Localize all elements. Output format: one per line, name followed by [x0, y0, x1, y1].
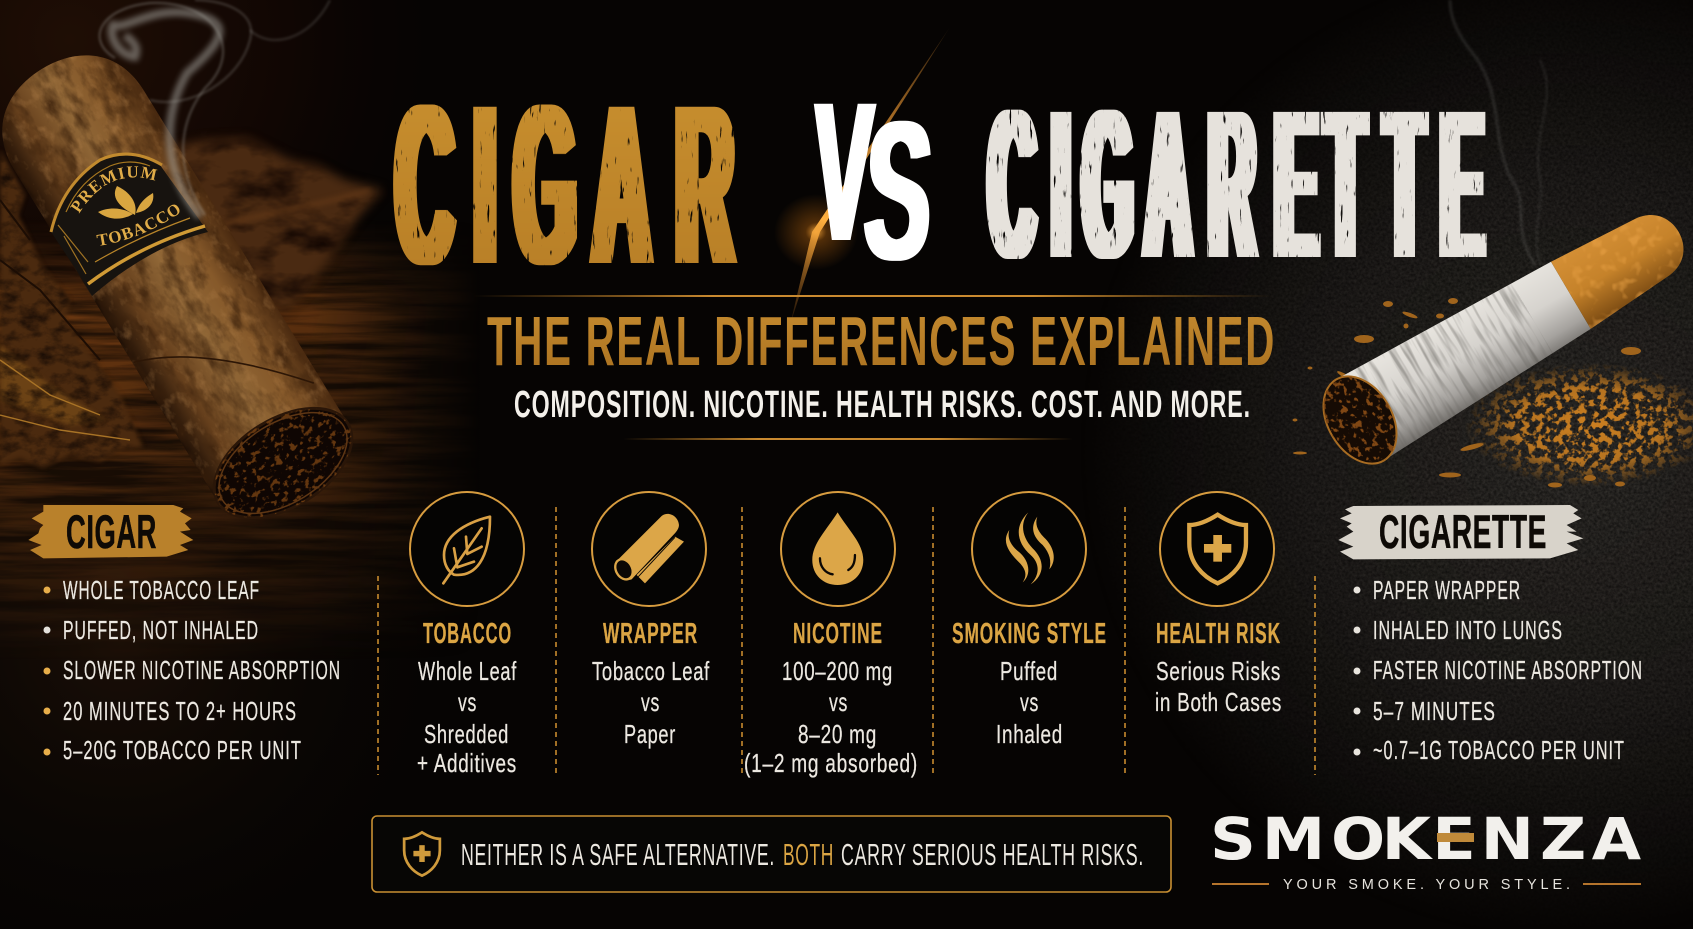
logo: [1210, 806, 1641, 893]
cigarette: [1322, 215, 1684, 465]
tagline: COMPOSITION. NICOTINE. HEALTH RISKS. COST. AND MORE.: [514, 384, 1251, 426]
heading: wrapper: WRAPPER: [603, 618, 698, 650]
rule bottom: [623, 438, 1073, 440]
text: tobacco comparison: + Additives: [417, 748, 517, 778]
cigar list text: 5–20G TOBACCO PER UNIT: [63, 735, 302, 765]
callout: warning: [372, 816, 1171, 892]
icon: smoke waves: [972, 492, 1086, 606]
cigar wrapper body: [2, 55, 353, 518]
column: nicotine: [744, 492, 918, 778]
asphalt surface: [1148, 30, 1693, 867]
logo rule right: [1583, 883, 1641, 885]
text: nicotine comparison: [744, 656, 918, 778]
warning text: NEITHER IS A SAFE ALTERNATIVE.: [461, 837, 775, 872]
cigarette list text: INHALED INTO LUNGS: [1373, 615, 1563, 645]
column: tobacco: [410, 492, 524, 778]
text: tobacco comparison: Whole Leaf: [418, 656, 517, 686]
cigarette bullets: [1354, 586, 1360, 756]
CIGAR word: CIGAR: [396, 59, 733, 312]
cigar list text: WHOLE TOBACCO LEAF: [63, 575, 260, 605]
text: tobacco comparison: [417, 656, 517, 778]
rule top: [473, 295, 1273, 297]
cigar list text: [63, 575, 341, 765]
cut foot of cigar: [214, 406, 353, 518]
cigarette list text: PAPER WRAPPER: [1373, 575, 1521, 605]
logo rule left: [1212, 883, 1269, 885]
logo wordmark: SMOKENZA: [1210, 806, 1641, 873]
cigarette brush heading: CIGARETTE: [1379, 505, 1547, 558]
filter tip: [1551, 215, 1684, 329]
text: wrapper comparison: Tobacco Leaf: [592, 656, 710, 686]
logo tagline: YOUR SMOKE. YOUR STYLE.: [1283, 877, 1570, 893]
text: style comparison: [996, 656, 1063, 749]
text: style comparison: Puffed: [1000, 656, 1058, 686]
title: [396, 27, 1483, 325]
VS: V: [811, 61, 876, 283]
cigar: [2, 55, 353, 518]
tobacco pile: [1292, 298, 1693, 495]
warning text: BOTH: [783, 837, 834, 872]
tobacco leaves behind cigar: [0, 138, 383, 468]
heading: smoking style: SMOKING STYLE: [952, 618, 1107, 650]
text: health comparison: [1155, 656, 1282, 717]
text: nicotine comparison: 8–20 mg: [798, 719, 877, 749]
heading: health risk: HEALTH RISK: [1156, 618, 1281, 650]
column: health risk: [1155, 492, 1282, 717]
glow streak: [774, 27, 950, 325]
text: wrapper comparison: vs: [641, 687, 660, 717]
TOBACCO label: TOBACCO: [96, 204, 180, 246]
CIGARETTE word: CIGARETTE: [989, 67, 1483, 303]
panel: cigar list: [28, 505, 341, 765]
cigar smoke: [100, 0, 330, 217]
heading: nicotine: NICOTINE: [793, 618, 883, 650]
cigarette brush heading: [1338, 505, 1583, 559]
wood table: [0, 240, 461, 636]
cigar bullets: [44, 586, 50, 756]
text: wrapper comparison: Paper: [624, 719, 676, 749]
cigar list text: PUFFED, NOT INHALED: [63, 615, 259, 645]
cigar list text: SLOWER NICOTINE ABSORPTION: [63, 655, 341, 685]
cigar list text: 20 MINUTES TO 2+ HOURS: [63, 696, 297, 726]
VS: [811, 61, 937, 302]
cigarette list text: 5–7 MINUTES: [1373, 696, 1496, 726]
icon: shield: [1160, 492, 1274, 606]
text: style comparison: vs: [1020, 687, 1039, 717]
VS: S: [860, 81, 937, 302]
paper body: [1336, 255, 1595, 460]
cigar brush heading: [28, 505, 193, 558]
icon: warning shield: [404, 832, 440, 876]
dashed dividers: [378, 507, 1315, 775]
text: nicotine comparison: 100–200 mg: [782, 656, 893, 686]
icon: drop: [781, 492, 895, 606]
column: smoking style: [952, 492, 1107, 749]
tobacco end: [1322, 375, 1398, 465]
text: health comparison: Serious Risks: [1156, 656, 1281, 686]
cigarette list text: [1373, 575, 1643, 765]
logo gold bar: [1437, 833, 1474, 842]
cigar brush heading: CIGAR: [66, 505, 157, 558]
heading: tobacco: TOBACCO: [423, 618, 512, 650]
text: style comparison: Inhaled: [996, 719, 1063, 749]
column: wrapper: [592, 492, 710, 749]
text: nicotine comparison: vs: [829, 687, 848, 717]
text: wrapper comparison: [592, 656, 710, 749]
cigarette smoke: [1450, 0, 1547, 265]
icon: leaf: [410, 492, 524, 606]
text: health comparison: in Both Cases: [1155, 687, 1282, 717]
text: nicotine comparison: (1–2 mg absorbed): [744, 748, 918, 778]
text: tobacco comparison: Shredded: [424, 719, 509, 749]
text: tobacco comparison: vs: [458, 687, 477, 717]
band leaf emblem: [98, 186, 153, 219]
icon: paper roll: [592, 492, 706, 606]
warning text: CARRY SERIOUS HEALTH RISKS.: [841, 837, 1144, 872]
cigar band: [50, 152, 208, 296]
panel: cigarette list: [1338, 505, 1643, 765]
PREMIUM label: PREMIUM: [70, 166, 158, 214]
